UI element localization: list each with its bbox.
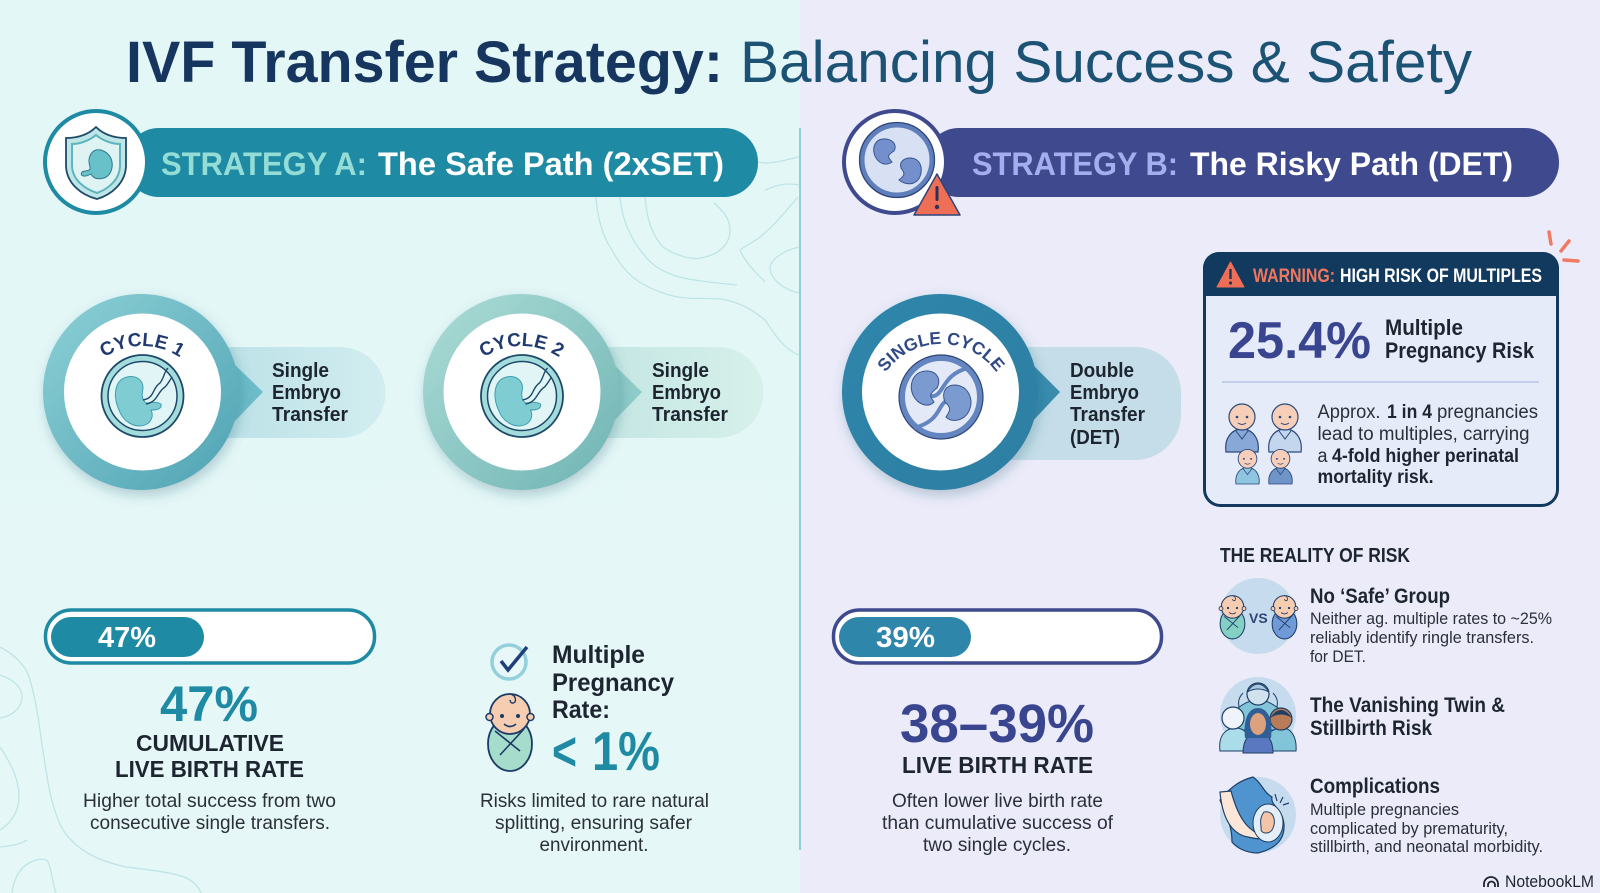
risk item: complications <box>1220 775 1543 856</box>
stat: live birth rate: than cumulative success of <box>882 812 1114 834</box>
risk item: vanishing twin <box>1220 677 1505 753</box>
stat: cumulative live birth rate: LIVE BIRTH RATE <box>115 756 304 782</box>
callout: single embryo transfer <box>200 347 386 438</box>
stat: 25.4% <box>1228 312 1535 370</box>
icon: shield with embryo <box>45 111 147 213</box>
stat: 25.4%: Pregnancy Risk <box>1385 338 1535 363</box>
panel: strategy A header: STRATEGY A: <box>161 146 367 182</box>
icon: two babies versus: VS <box>1249 610 1268 626</box>
bar chart: 47% cumulative: 47% <box>98 622 156 654</box>
stat: live birth rate: LIVE BIRTH RATE <box>902 752 1093 778</box>
stat: cumulative live birth rate: 47% <box>160 676 258 732</box>
title: Balancing Success & Safety <box>740 30 1472 95</box>
stat: multiple pregnancy under 1%: Rate: <box>552 696 610 724</box>
icon: pregnant belly <box>1220 777 1296 853</box>
stat: multiple pregnancy under 1%: 1% <box>592 720 660 782</box>
stat: cumulative live birth rate: CUMULATIVE <box>136 730 284 756</box>
warning body text: a <box>1318 446 1328 467</box>
icon: group of people <box>1220 677 1296 753</box>
title: IVF Transfer Strategy: <box>126 30 723 95</box>
warning header: HIGH RISK OF MULTIPLES <box>1340 266 1542 287</box>
stat: multiple pregnancy under 1% <box>480 641 709 856</box>
stat: 25.4%: 25.4% <box>1228 312 1371 370</box>
warning body text <box>1318 402 1538 488</box>
panel: strategy B header <box>844 111 1559 215</box>
callout: double embryo transfer: (DET) <box>1070 426 1120 449</box>
stat: live birth rate: two single cycles. <box>923 834 1071 856</box>
callout: double embryo transfer <box>1000 347 1181 460</box>
bar chart: 39%: 39% <box>876 622 935 654</box>
stat: multiple pregnancy under 1%: splitting, ensuring safer <box>495 812 692 834</box>
bar chart: 39% <box>834 610 1162 663</box>
warning body text: pregnancies <box>1437 402 1538 423</box>
warning header: WARNING: <box>1253 266 1335 287</box>
risk item: no safe group: reliably identify ringle transfers. <box>1310 629 1534 647</box>
risk item: complications: complicated by prematurity, <box>1310 820 1508 838</box>
title <box>126 30 1472 95</box>
background: right panel <box>800 0 1600 893</box>
callout: double embryo transfer: Embryo <box>1070 381 1139 404</box>
icon: two babies versus <box>1219 578 1298 654</box>
stat: multiple pregnancy under 1%: < <box>552 720 577 782</box>
background: left panel <box>0 0 800 893</box>
panel: cycle 1: CYCLE 1 <box>100 332 184 357</box>
panel: strategy A header: The Safe Path (2xSET) <box>378 146 724 182</box>
callout: single embryo transfer: Single <box>272 359 329 382</box>
stat: cumulative live birth rate: Higher total success from two <box>83 790 336 812</box>
warning body text: lead to multiples, carrying <box>1318 424 1530 445</box>
risk item: vanishing twin: The Vanishing Twin & <box>1310 694 1505 717</box>
warning body text: Approx. <box>1318 402 1380 423</box>
stat: live birth rate <box>882 694 1114 856</box>
risk item: no safe group: No ‘Safe’ Group <box>1310 585 1450 608</box>
stat: multiple pregnancy under 1%: Pregnancy <box>552 669 674 697</box>
warning body text: mortality risk. <box>1318 467 1434 488</box>
panel: strategy A header <box>45 111 758 213</box>
callout: single embryo transfer: Embryo <box>272 381 341 404</box>
callout: single embryo transfer: Single <box>652 359 709 382</box>
panel: warning card <box>1203 252 1559 506</box>
stat: multiple pregnancy under 1%: Multiple <box>552 641 645 669</box>
risk item: complications: Multiple pregnancies <box>1310 801 1459 819</box>
risk item: no safe group: for DET. <box>1310 648 1366 666</box>
risk item: complications: Complications <box>1310 775 1440 798</box>
icon: swaddled baby <box>486 694 534 771</box>
risk item: no safe group <box>1219 578 1552 666</box>
stat: cumulative live birth rate <box>83 676 336 834</box>
risk item: no safe group: Neither ag. multiple rates to ~25% <box>1310 610 1552 628</box>
heading: the reality of risk: THE REALITY OF RISK <box>1220 545 1410 567</box>
warning body text: 1 in 4 <box>1387 402 1432 423</box>
callout: single embryo transfer: Transfer <box>652 403 728 426</box>
stat: multiple pregnancy under 1%: Risks limited to rare natural <box>480 790 709 812</box>
stat: multiple pregnancy under 1%: environment. <box>540 834 648 856</box>
icon: embryo <box>102 355 184 437</box>
icon: warning sparks <box>1549 232 1578 261</box>
icon: warning triangle <box>914 174 960 215</box>
warning header <box>1203 252 1559 296</box>
stat: live birth rate: Often lower live birth rate <box>892 790 1103 812</box>
callout: single embryo transfer: Embryo <box>652 381 721 404</box>
stat: cumulative live birth rate: consecutive single transfers. <box>90 812 330 834</box>
watermark: NotebookLM: NotebookLM <box>1505 872 1594 891</box>
panel: cycle 2: CYCLE 2 <box>480 332 564 357</box>
panel: single cycle <box>838 292 1181 502</box>
callout: double embryo transfer: Double <box>1070 359 1134 382</box>
risk item: vanishing twin: Stillbirth Risk <box>1310 717 1432 740</box>
icon: twin embryos <box>844 111 946 213</box>
callout: single embryo transfer <box>580 347 764 438</box>
callout: double embryo transfer: Transfer <box>1070 403 1145 426</box>
callout: single embryo transfer: Transfer <box>272 403 348 426</box>
stat: live birth rate: 38–39% <box>900 694 1094 754</box>
risk item: complications: stillbirth, and neonatal morbidity. <box>1310 838 1543 856</box>
panel: strategy B header: The Risky Path (DET) <box>1190 146 1513 182</box>
panel: cycle 1 <box>38 292 386 502</box>
icon: embryo <box>481 355 563 437</box>
panel: strategy B header: STRATEGY B: <box>972 146 1178 182</box>
icon: four babies <box>1226 404 1301 484</box>
stat: 25.4%: Multiple <box>1385 315 1463 340</box>
icon: twin embryos <box>899 355 983 439</box>
bar chart: 47% cumulative <box>46 610 374 663</box>
icon: check mark <box>492 645 527 679</box>
panel: single cycle: SINGLE CYCLE <box>878 332 1006 372</box>
panel: cycle 2 <box>418 292 764 502</box>
warning body text: 4-fold higher perinatal <box>1332 446 1519 467</box>
